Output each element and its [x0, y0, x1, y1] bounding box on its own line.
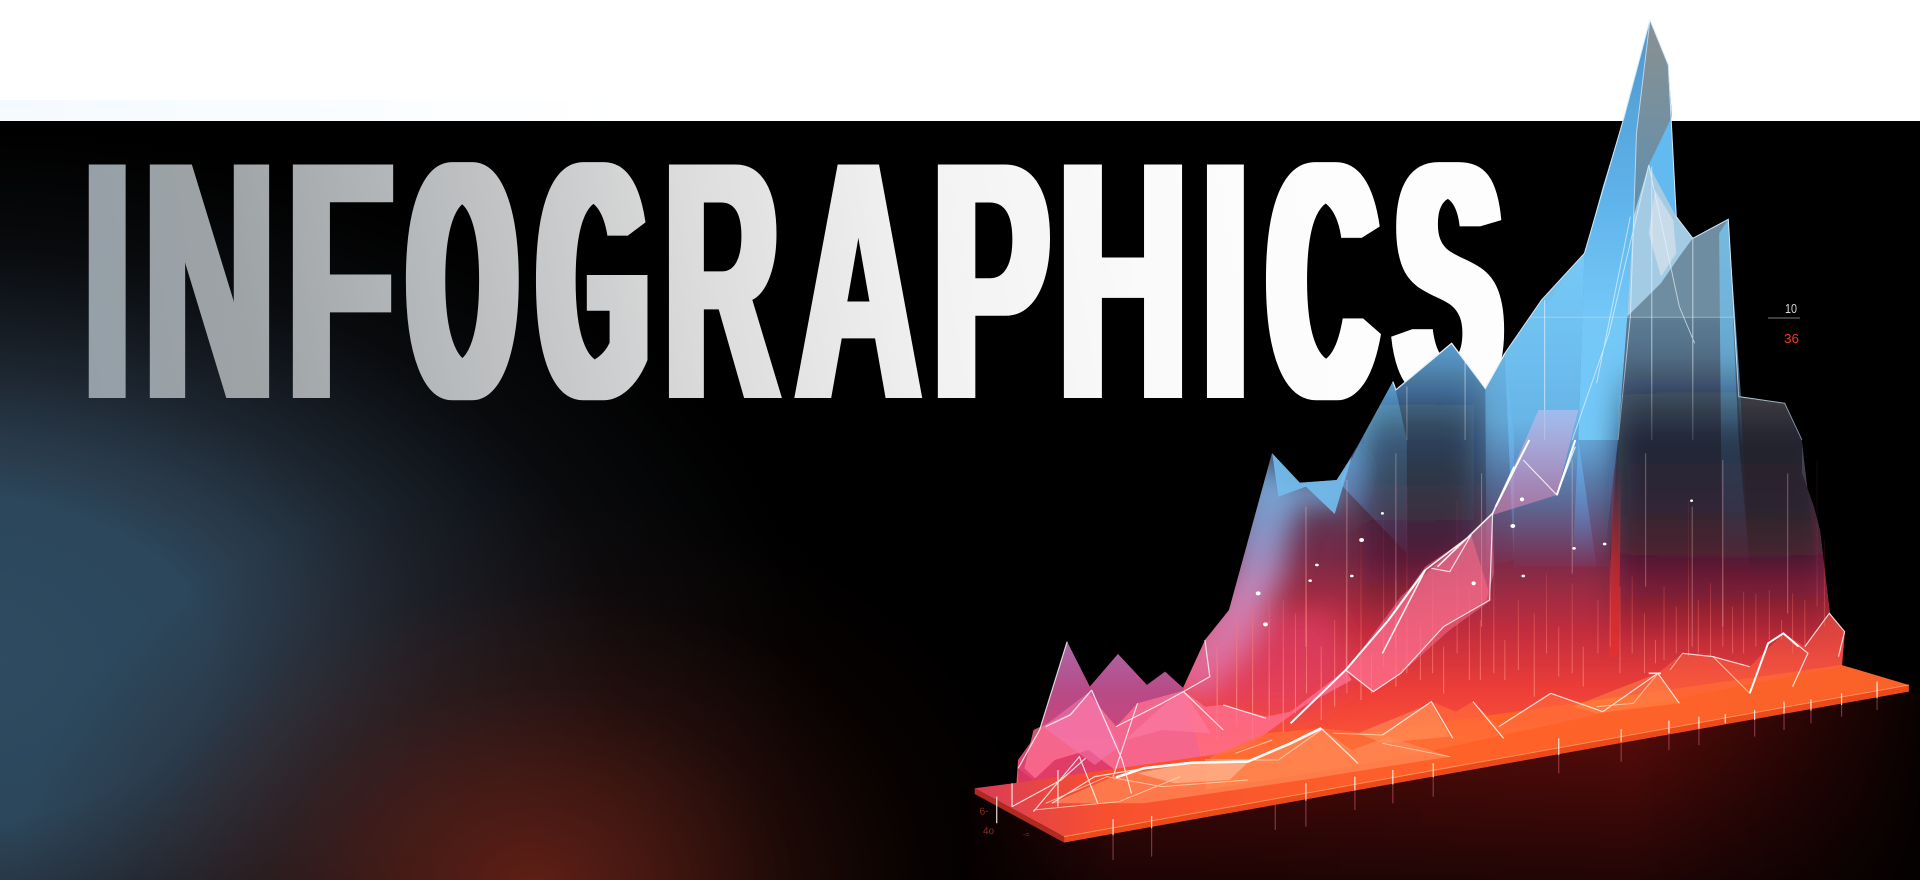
small plate labels: 4o [983, 826, 995, 837]
chart: white ridge lines [1012, 447, 1845, 812]
chart: orange waves [1205, 613, 1845, 790]
chart: back silhouette [1015, 20, 1845, 837]
chart: lower translucent layers [960, 410, 1920, 880]
axis tick line [1768, 318, 1800, 319]
chart: reflection under the plate [960, 692, 1920, 880]
chart: reflected light streaks [1113, 698, 1877, 860]
small plate labels [979, 806, 1029, 839]
chart: purple left peaks [1018, 642, 1205, 793]
chart: plate top surface [975, 665, 1909, 837]
chart: glowing data dots [1256, 497, 1693, 626]
chart: soft shading clipped to the silhouette [1162, 360, 1829, 713]
chart: pink ridge bands [1346, 410, 1578, 693]
chart: plate left side [975, 788, 1064, 843]
chart: plate front side [1064, 685, 1909, 843]
chart: white tick marks on plate [997, 682, 1877, 835]
pale tinted strip above the dark panel [0, 100, 620, 121]
small plate labels: -= [1023, 832, 1029, 839]
chart: vertical light streaks [1217, 460, 1824, 740]
axis label: 10: 10 [1785, 301, 1797, 316]
chart: red streak [1609, 467, 1621, 660]
axis label: 36: 36 [1784, 331, 1799, 346]
chart: blue upper facets [1340, 20, 1817, 573]
chart: left blue peak [1272, 453, 1352, 514]
title: INFOGRAPHICS [88, 162, 1504, 400]
chart: translucent mountain data visual [960, 20, 1920, 880]
small plate labels: 6- [979, 806, 989, 818]
